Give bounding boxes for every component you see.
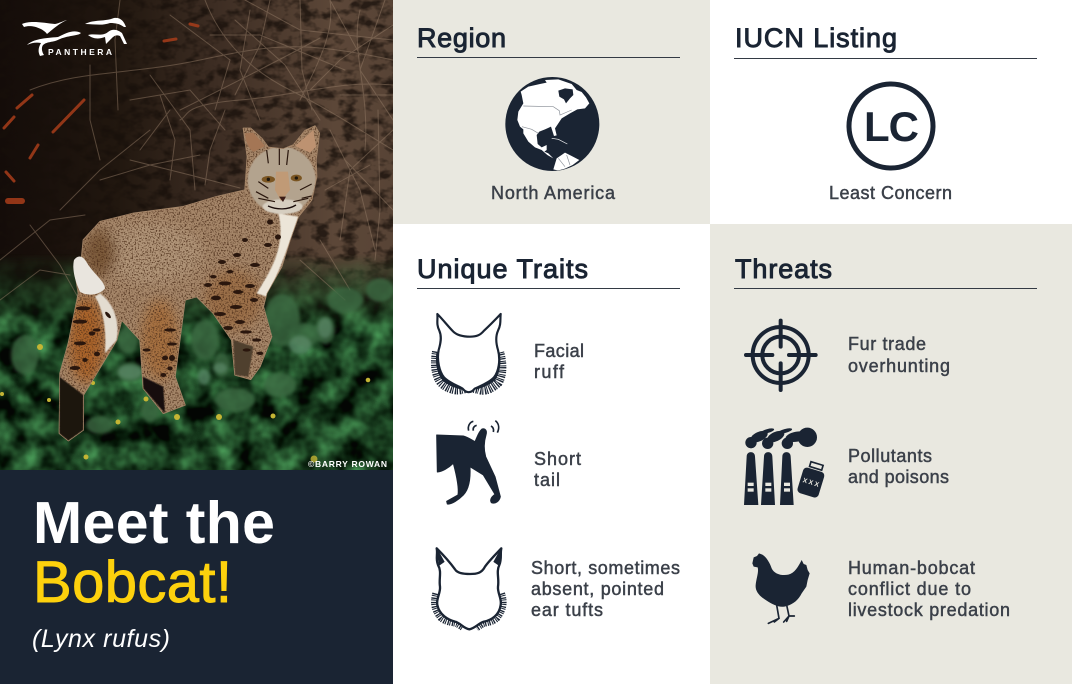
scientific name: (Lynx rufus) [32, 625, 170, 653]
label: facial ruff: Facial [534, 341, 584, 361]
face [262, 176, 275, 183]
logo: Panthera: PANTHERA [48, 47, 112, 57]
label: fur trade [848, 334, 950, 376]
label: short tail: tail [534, 470, 560, 490]
bobcat [50, 120, 327, 447]
label: Least Concern: Least Concern [829, 183, 952, 203]
tail [73, 256, 105, 295]
label: conflict: livestock predation [848, 600, 1010, 620]
tonal patches [68, 223, 262, 383]
heading: Unique Traits: Unique Traits [417, 254, 588, 284]
heading: Region: Region [417, 23, 506, 53]
label: pollutants: Pollutants [848, 446, 932, 466]
label: pollutants: and poisons [848, 467, 949, 487]
label: pollutants [848, 446, 949, 487]
icon: factory and poison: XXX [802, 477, 820, 489]
label: ear tufts: absent, pointed [531, 579, 664, 599]
yellow flowers [0, 344, 370, 462]
branches [0, 0, 393, 310]
label: facial ruff: ruff [534, 362, 565, 382]
panel: IUCN listing [710, 0, 1072, 224]
heading: Bobcat!: Bobcat! [33, 550, 232, 615]
icon: LC badge [849, 84, 933, 168]
icon: chicken [752, 553, 810, 623]
label: North America: North America [491, 183, 616, 203]
label: conflict [848, 558, 1010, 620]
panel: title [0, 470, 393, 684]
foliage leaves [11, 278, 394, 434]
icon: short tail [437, 421, 500, 504]
photo credit: ©BARRY ROWAN [308, 459, 387, 469]
icon: factory and poison [744, 427, 827, 505]
panel: threats [710, 224, 1072, 684]
label: conflict: conflict due to [848, 579, 971, 599]
panel: bobcat photograph [0, 0, 394, 470]
icon: ear tufts [434, 548, 504, 629]
label: fur trade: overhunting [848, 356, 950, 376]
red glints at left of photo [4, 24, 198, 201]
label: short tail: Short [534, 449, 581, 469]
spots [70, 148, 312, 377]
icon: globe [505, 77, 599, 171]
panel: region [393, 0, 710, 224]
label: ear tufts: Short, sometimes [531, 558, 680, 578]
heading: Meet the: Meet the [33, 490, 275, 556]
heading: Threats: Threats [735, 254, 832, 284]
panel: unique traits [393, 224, 710, 684]
icon: facial ruff [436, 314, 502, 392]
label: ear tufts: ear tufts [531, 600, 603, 620]
logo: Panthera [22, 18, 127, 57]
icon: target [746, 321, 816, 390]
label: facial ruff [534, 341, 584, 382]
heading: IUCN Listing: IUCN Listing [735, 23, 897, 53]
label: conflict: Human-bobcat [848, 558, 975, 578]
icon: LC badge: LC [864, 103, 919, 150]
label: short tail [534, 449, 581, 490]
label: fur trade: Fur trade [848, 334, 926, 354]
label: ear tufts [531, 558, 680, 620]
